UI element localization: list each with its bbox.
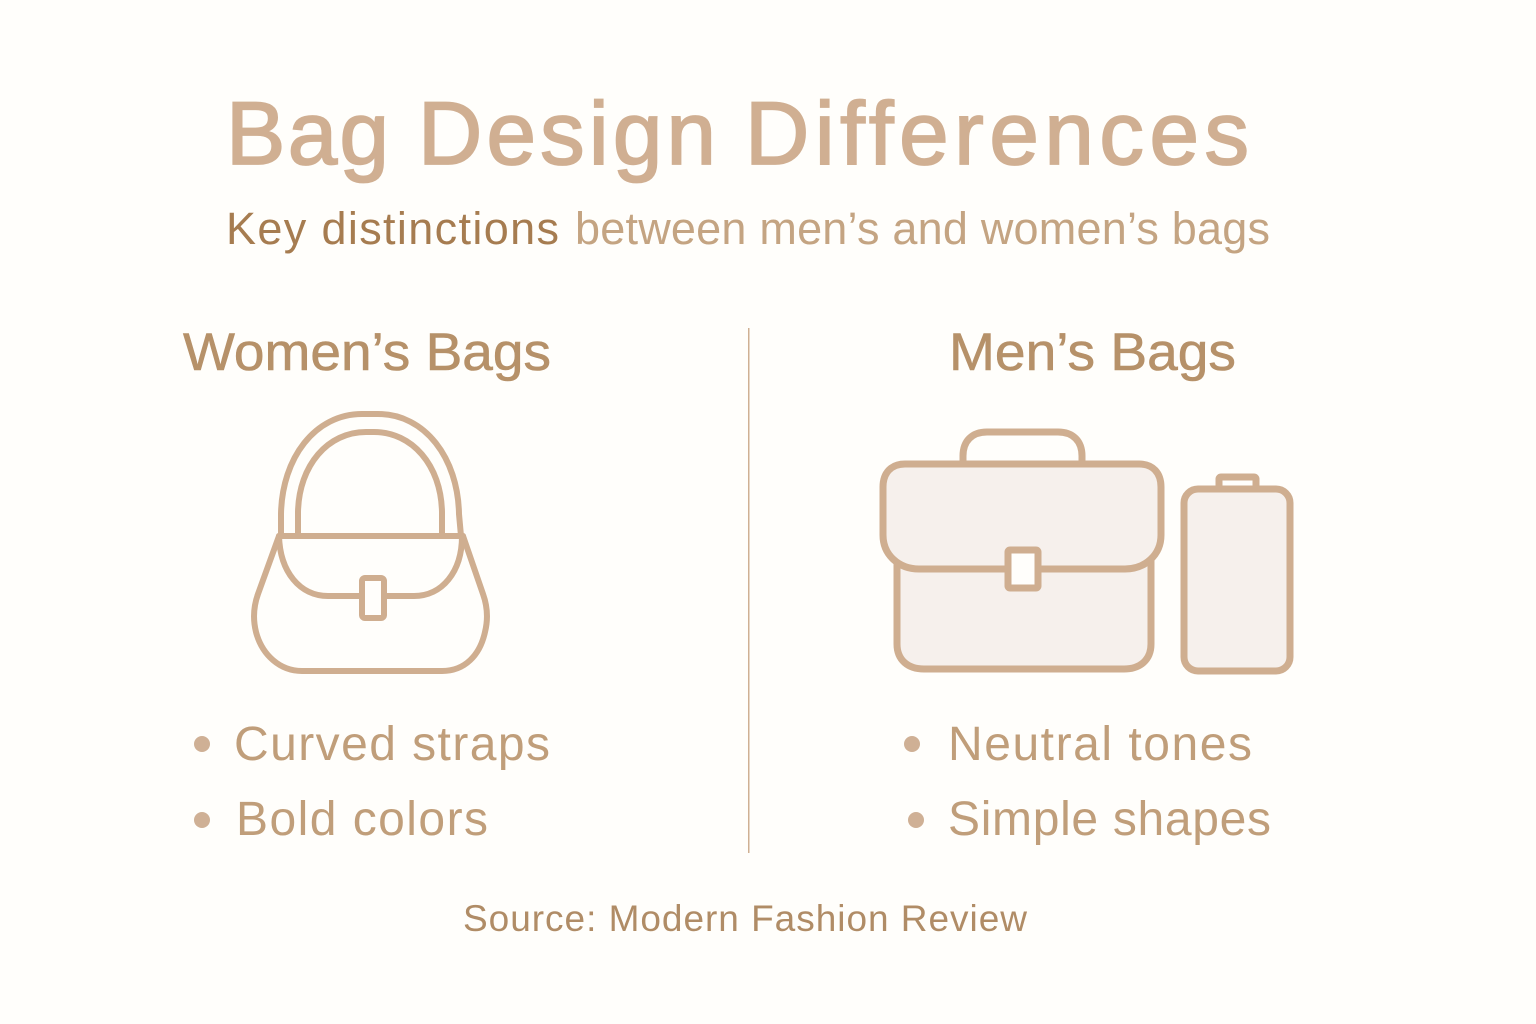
icon: small men's bag: [1184, 477, 1290, 671]
list: men's bag traits: [904, 718, 1271, 846]
heading: men's bags: Men’s Bags: [949, 323, 1236, 382]
icon: women's handbag: [254, 414, 487, 671]
subtitle: between men’s and women’s bags: [575, 203, 1270, 254]
title: Differences: [745, 83, 1249, 183]
title: Design: [418, 83, 716, 183]
subtitle: Key distinctions: [226, 203, 559, 254]
bullet: simple shapes: Simple shapes: [948, 793, 1271, 846]
bullet: bold colors: Bold colors: [236, 793, 488, 846]
divider: [748, 328, 750, 853]
heading: women's bags: Women’s Bags: [183, 323, 551, 382]
icon: men's briefcase: [883, 432, 1161, 669]
bullet: neutral tones: Neutral tones: [948, 718, 1252, 771]
list: women's bag traits: [194, 718, 550, 846]
bullet: curved straps: Curved straps: [234, 718, 550, 771]
source note: Source: Modern Fashion Review: [463, 898, 1027, 939]
title: Bag: [226, 83, 389, 183]
